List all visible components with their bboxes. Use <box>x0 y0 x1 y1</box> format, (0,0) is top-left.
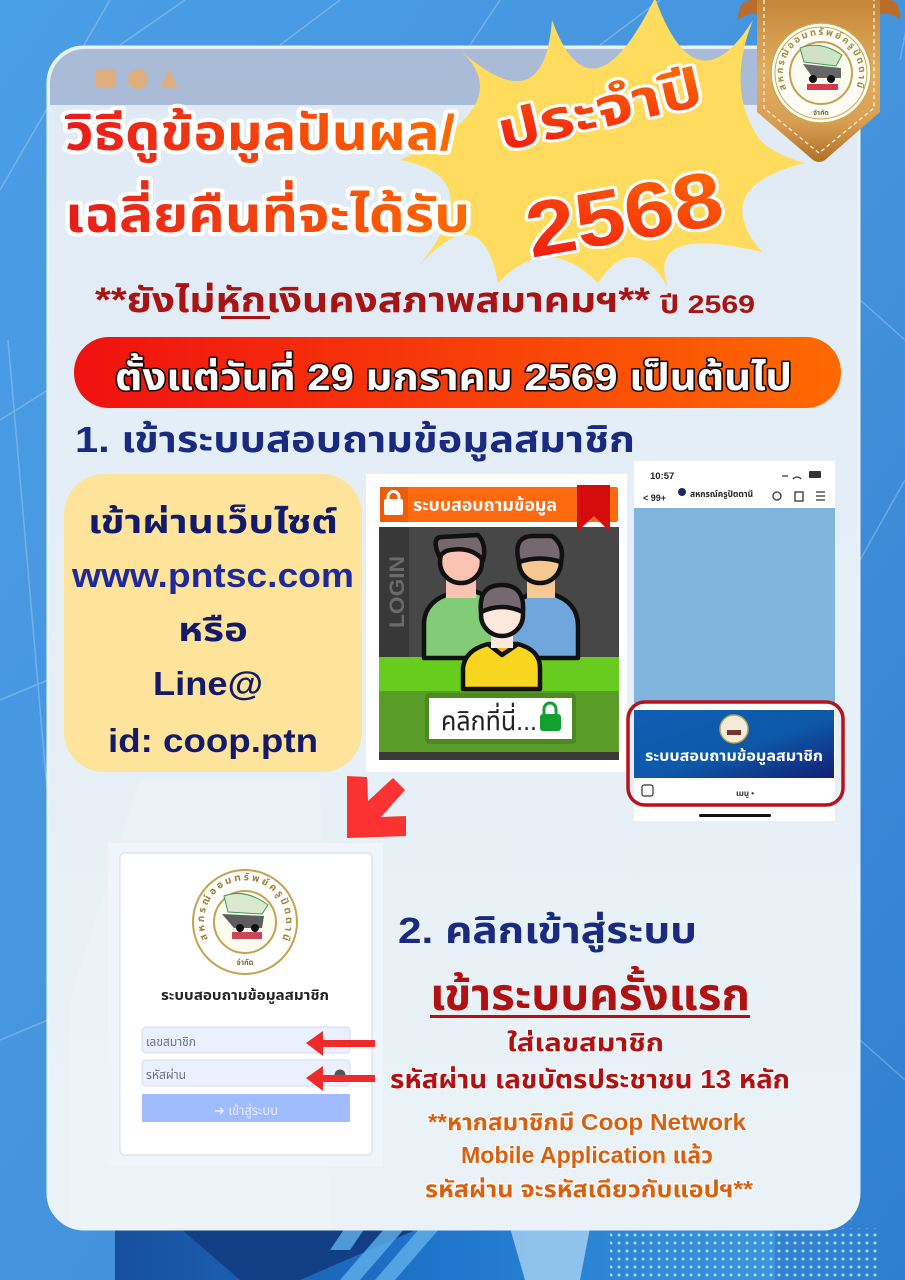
login instructions: รหัสผ่าน เลขบัตรประชาชน 13 หลัก <box>390 1064 790 1094</box>
year label <box>492 57 729 275</box>
click here button: คลิกที่นี่... <box>441 702 537 736</box>
header band of card <box>50 49 857 105</box>
arrow: to member number <box>306 1031 375 1056</box>
login button <box>142 1094 350 1122</box>
logo: cooperative seal: สหกรณ์ออมทรัพย์ครูปัตตานี <box>198 872 292 942</box>
arrow: to password <box>306 1066 375 1091</box>
logo: cooperative seal <box>192 869 298 975</box>
panel: access channels: www.pntsc.com <box>71 557 354 595</box>
member number input <box>142 1027 350 1053</box>
title <box>65 105 470 243</box>
note: mobile app password: **หากสมาชิกมี Coop Network <box>428 1109 746 1135</box>
ribbon badge with logo <box>738 0 900 162</box>
green floor <box>379 657 619 692</box>
logo: cooperative seal: สหกรณ์ออมทรัพย์ครูปัตตานี <box>778 28 864 90</box>
panel: access channels <box>64 474 362 772</box>
title: เฉลี่ยคืนที่จะได้รับ <box>65 180 470 243</box>
panel: LINE phone screenshot: สหกรณ์ครูปัตตานี <box>690 489 753 499</box>
note: mobile app password: รหัสผ่าน จะรหัสเดียวกับแอปฯ** <box>425 1176 753 1202</box>
password input <box>142 1060 350 1086</box>
login button: ➜ เข้าสู่ระบบ <box>214 1103 278 1118</box>
note: mobile app password: Mobile Application แล้ว <box>461 1142 713 1168</box>
panel: access channels: Line@ <box>153 665 263 702</box>
panel: website login image <box>366 474 627 772</box>
year label: ประจำปี <box>492 57 708 163</box>
window control icons <box>96 69 178 89</box>
panel: login form screenshot <box>108 843 383 1156</box>
login instructions: ใส่เลขสมาชิก <box>507 1029 664 1057</box>
panel: login form screenshot: ระบบสอบถามข้อมูลสมาชิก <box>161 988 329 1005</box>
title: วิธีดูข้อมูลปันผล/ <box>65 105 455 163</box>
logo: cooperative seal: จำกัด <box>813 109 829 117</box>
highlighted rich menu <box>628 702 843 817</box>
logo: cooperative seal: จำกัด <box>237 958 254 967</box>
year label: 2568 <box>519 153 729 275</box>
login instructions <box>390 1029 790 1094</box>
login side tab <box>379 527 409 657</box>
note: mobile app password <box>425 1109 753 1202</box>
panel: access channels: id: coop.ptn <box>108 722 318 759</box>
date banner pill: ตั้งแต่วันที่ 29 มกราคม 2569 เป็นต้นไป <box>115 351 792 398</box>
date banner pill <box>74 337 841 408</box>
people icon <box>424 535 578 689</box>
arrow: down-left to login <box>347 776 406 838</box>
first login heading: เข้าระบบครั้งแรก <box>430 966 750 1020</box>
login side tab: LOGIN <box>386 556 409 628</box>
heading: step 2: 2. คลิกเข้าสู่ระบบ <box>398 910 697 952</box>
highlighted rich menu: ระบบสอบถามข้อมูลสมาชิก <box>645 747 823 766</box>
panel: LINE phone screenshot <box>628 461 843 821</box>
orange header bar: ระบบสอบถามข้อมูล <box>413 495 557 516</box>
panel: LINE phone screenshot: 10:57 <box>650 471 674 482</box>
password input: รหัสผ่าน <box>146 1068 186 1082</box>
panel: LINE phone screenshot: < 99+ <box>643 493 666 503</box>
subtitle note: **ยังไม่หักเงินคงสภาพสมาคมฯ** <box>95 281 650 320</box>
starburst <box>400 0 805 287</box>
subtitle note: ปี 2569 <box>660 291 755 319</box>
panel: access channels: เข้าผ่านเว็บไซต์ <box>88 503 338 540</box>
panel: access channels: หรือ <box>178 611 248 648</box>
highlighted rich menu: เมนู • <box>736 789 754 798</box>
orange header bar <box>380 485 618 532</box>
logo: cooperative seal <box>770 22 872 124</box>
heading: step 1: 1. เข้าระบบสอบถามข้อมูลสมาชิก <box>75 419 635 461</box>
member number input: เลขสมาชิก <box>146 1035 196 1049</box>
click here button <box>425 693 576 744</box>
